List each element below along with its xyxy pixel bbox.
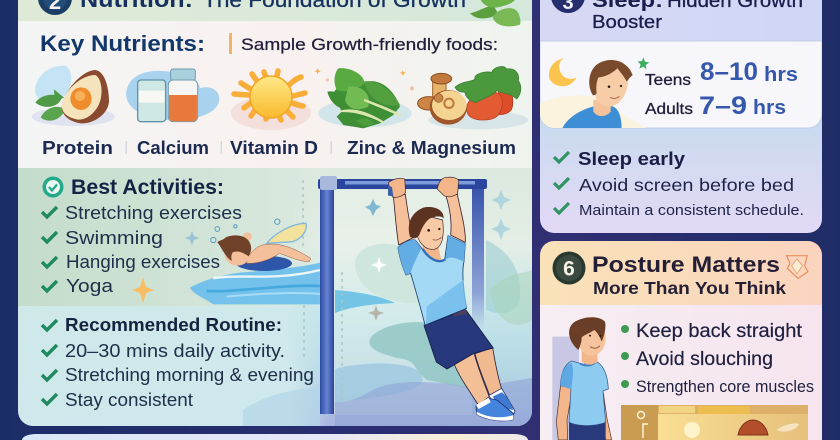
labels: nutrients: Protein <box>42 138 113 158</box>
card: sleep hours: 8–10 <box>700 58 758 86</box>
list: sleep tips: Sleep early <box>578 148 686 169</box>
list: best activities <box>42 176 242 303</box>
panel: bottom card, partly visible <box>22 434 528 440</box>
legs <box>475 348 502 397</box>
heading: key nutrients: Key Nutrients: <box>40 31 205 56</box>
labels: nutrients: Calcium <box>137 138 209 158</box>
heading: sleep: Booster <box>592 11 662 32</box>
list: best activities: Hanging exercises <box>66 251 220 272</box>
heading: posture: Posture Matters <box>592 252 780 277</box>
header band: posture <box>540 241 822 306</box>
list: sleep tips: Avoid screen before bed <box>579 175 794 195</box>
list: posture tips: Keep back straight <box>636 321 803 342</box>
card: sleep hours: hrs <box>764 64 798 86</box>
illustration: swimmer <box>190 219 320 304</box>
labels: nutrients: Zinc & Magnesium <box>347 138 516 158</box>
labels: nutrients: Vitamin D <box>230 138 318 158</box>
card: sleep hours: Adults <box>645 101 693 118</box>
panel: nutrition and activities <box>18 0 532 426</box>
panel: sleep <box>540 0 822 233</box>
dashed guides <box>303 180 342 405</box>
illustration: moon and boy <box>540 57 649 130</box>
badge 6 <box>552 252 586 284</box>
heading: sleep <box>592 0 802 28</box>
illustration: posture scene <box>621 405 808 440</box>
icon: shield badge <box>787 256 808 278</box>
decorative blobs <box>243 240 532 426</box>
section: key nutrients <box>18 21 532 169</box>
list: recommended routine: Stay consistent <box>65 389 193 410</box>
card: sleep hours: 7–9 <box>699 92 747 120</box>
badge 6: 6 <box>563 258 575 280</box>
list: recommended routine <box>42 314 314 410</box>
icon: protein avocado <box>32 66 115 126</box>
subheading: sample foods: Sample Growth-friendly foods: <box>241 35 498 54</box>
icon: teal check badge <box>42 176 64 198</box>
illustration background <box>300 268 532 426</box>
list: best activities: Swimming <box>65 227 163 248</box>
illustration: boy hanging <box>388 177 515 421</box>
list: best activities: Best Activities: <box>71 176 224 199</box>
section: sleep tips background <box>540 118 822 233</box>
header: nutrition title <box>38 0 466 15</box>
heading: posture <box>592 252 786 298</box>
list: sleep tips: Maintain a consistent schedule. <box>579 202 804 219</box>
card: sleep hours: hrs <box>753 97 786 119</box>
icon: calcium milk and bottle <box>126 69 219 122</box>
list: posture tips: Strengthen core muscles <box>636 378 814 396</box>
sparkles near figure <box>365 190 511 321</box>
sparkles <box>132 277 154 303</box>
illustration: standing boy <box>552 317 612 440</box>
list: recommended routine: Stretching morning & evening <box>65 364 314 385</box>
head <box>417 215 443 249</box>
arms <box>393 194 413 245</box>
header band: sleep <box>540 0 822 42</box>
header band: nutrition <box>18 0 532 21</box>
list: posture tips <box>621 321 814 396</box>
icon: zinc and magnesium greens <box>314 68 414 128</box>
icon: zinc and magnesium mushrooms and tomato <box>418 67 528 129</box>
shorts <box>424 310 493 369</box>
badge 2 <box>38 0 72 15</box>
section: best activities <box>18 168 328 306</box>
icon: header leaves <box>470 0 520 26</box>
list: sleep tips <box>554 148 804 219</box>
section: recommended routine <box>18 306 532 426</box>
labels: nutrients <box>43 140 515 158</box>
list: recommended routine: 20–30 mins daily activity. <box>65 340 285 361</box>
list: recommended routine: Recommended Routine: <box>65 314 282 335</box>
list: best activities: Stretching exercises <box>65 202 242 223</box>
sleep hours text: Teens <box>645 72 691 89</box>
badge 3 <box>551 0 585 14</box>
list: posture tips: Avoid slouching <box>636 349 773 370</box>
neck <box>422 246 442 260</box>
section: posture body <box>540 305 822 440</box>
list: best activities: Yoga <box>66 275 114 296</box>
shirt <box>398 236 467 325</box>
panel: posture <box>540 241 822 440</box>
heading: posture: More Than You Think <box>593 278 786 298</box>
icon: vitamin D sun <box>231 71 311 130</box>
orange divider <box>229 33 232 54</box>
card: sleep hours <box>540 41 822 130</box>
illustration: pull-up bar <box>318 176 487 414</box>
shoes <box>489 388 515 415</box>
